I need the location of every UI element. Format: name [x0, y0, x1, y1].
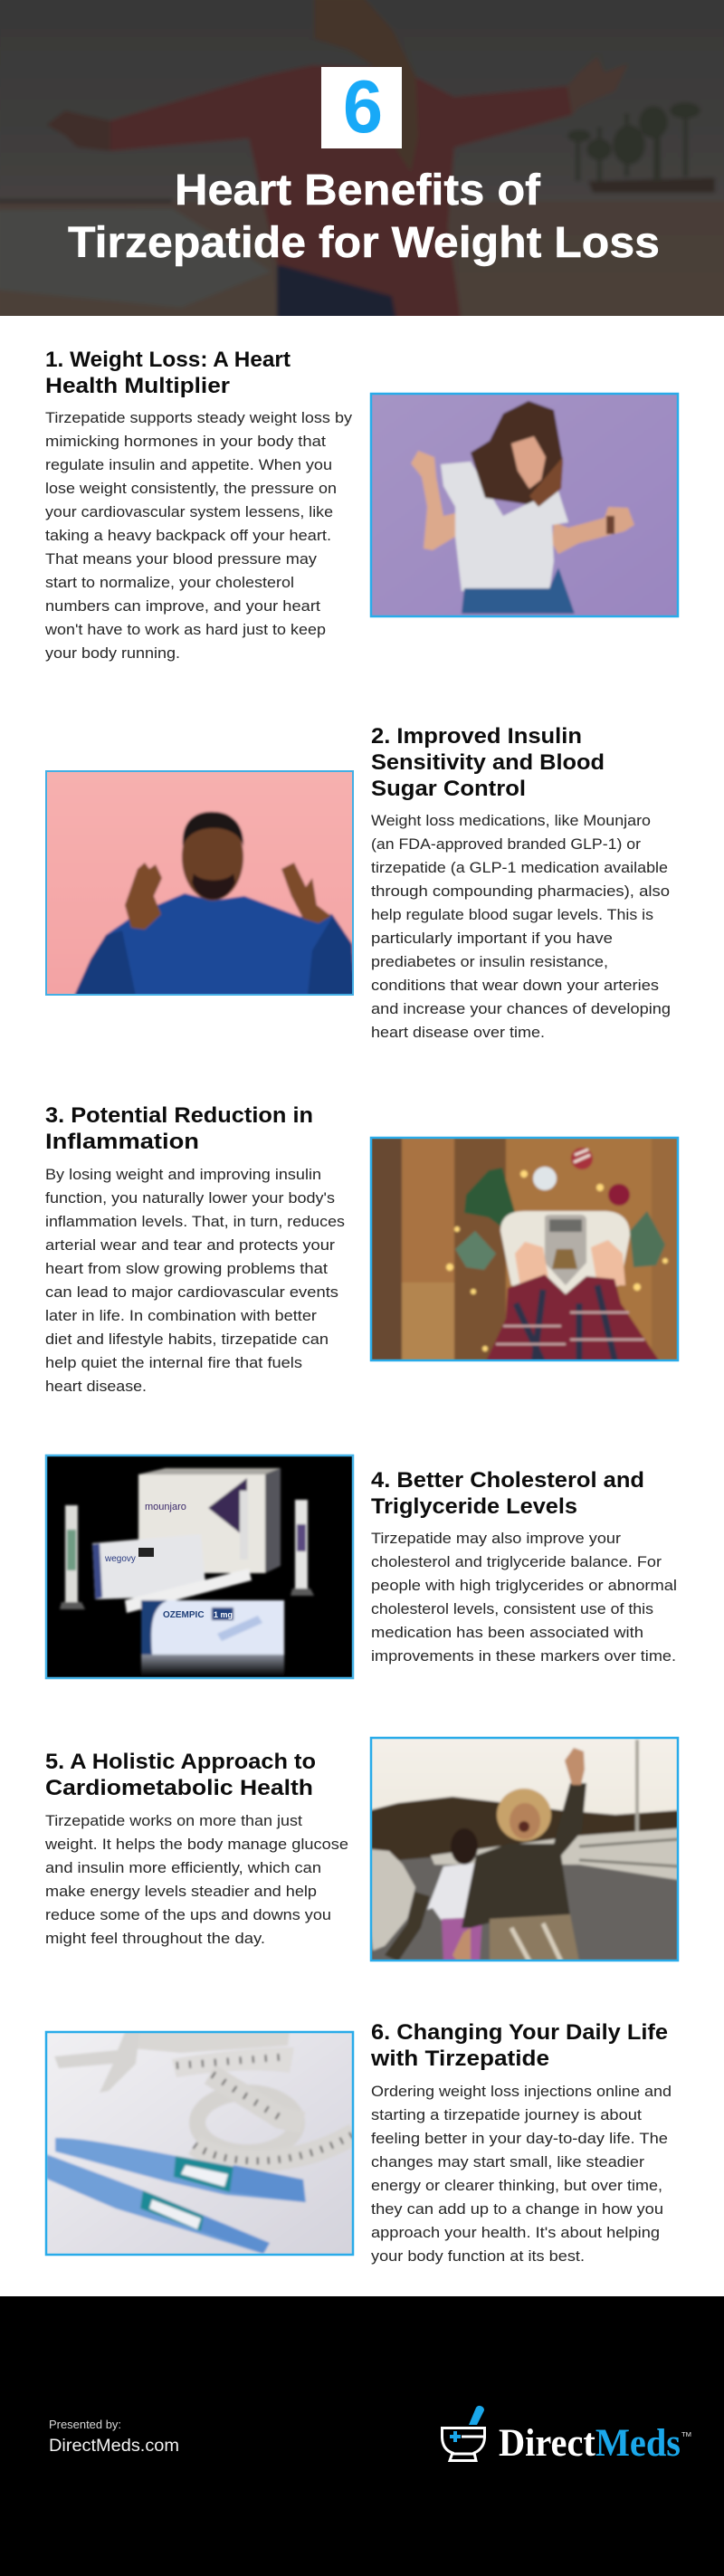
photo: women running outdoors on road: [370, 1737, 679, 1961]
body text 1: taking a heavy backpack off your heart.: [45, 527, 331, 544]
body text 3: help quiet the internal fire that fuels: [45, 1354, 302, 1371]
logo: DirectMeds: [442, 2406, 691, 2465]
body text 1: [44, 409, 353, 662]
heading 5: 5. A Holistic Approach to: [45, 1750, 316, 1774]
body text 2: tirzepatide (a GLP-1 medication available: [371, 859, 668, 876]
body text 4: improvements in these markers over time.: [371, 1647, 676, 1665]
heading 4: [371, 1468, 644, 1519]
body text 4: cholesterol and triglyceride balance. For: [371, 1553, 662, 1570]
body text 6: your body function at its best.: [371, 2247, 585, 2265]
body text 4: people with high triglycerides or abnormal: [371, 1577, 677, 1594]
body text 2: Weight loss medications, like Mounjaro: [371, 812, 651, 829]
body text 3: arterial wear and tear and protects your: [45, 1236, 335, 1254]
heading 2: Sensitivity and Blood: [371, 750, 605, 775]
photo: medication boxes and pens on black: OZEMPIC: [163, 1610, 205, 1620]
photo: medication boxes and pens on black: 1 mg: [214, 1610, 233, 1619]
body text 2: heart disease over time.: [371, 1024, 545, 1041]
panel: section 6 daily life: [45, 2020, 672, 2265]
panel: section 2 insulin sensitivity: [45, 724, 671, 1041]
body text 1: regulate insulin and appetite. When you: [45, 456, 332, 473]
body text 4: cholesterol levels, consistent use of this: [371, 1600, 653, 1617]
panel: section 4 cholesterol: [45, 1455, 677, 1679]
body text 4: medication has been associated with: [371, 1624, 643, 1641]
heading 5: [45, 1750, 316, 1800]
heading 6: [370, 2020, 668, 2071]
trademark: TM: [681, 2432, 691, 2438]
heading 2: [371, 724, 605, 801]
body text 5: and insulin more efficiently, which can: [45, 1859, 321, 1876]
body text 4: Tirzepatide may also improve your: [371, 1530, 621, 1547]
photo: man crossing fingers on pink background: [45, 770, 355, 996]
body text 2: prediabetes or insulin resistance,: [371, 953, 608, 970]
body text 1: start to normalize, your cholesterol: [45, 574, 294, 591]
photo: happy woman on purple background: [370, 393, 679, 617]
body text 6: changes may start small, like steadier: [371, 2153, 644, 2171]
body text 6: Ordering weight loss injections online and: [371, 2083, 672, 2100]
hero photo: woman on beach with arms outstretched: [0, 0, 724, 323]
heading 6: 6. Changing Your Daily Life: [371, 2020, 668, 2045]
body text 3: can lead to major cardiovascular events: [45, 1283, 338, 1301]
heading 2: Sugar Control: [371, 777, 526, 801]
hero banner: [0, 0, 724, 323]
body text 2: [371, 812, 671, 1041]
photo: medication boxes and pens on black: mounjaro: [145, 1502, 186, 1512]
body text 5: make energy levels steadier and help: [45, 1883, 317, 1900]
body text 1: That means your blood pressure may: [45, 550, 318, 568]
heading 1: Health Multiplier: [45, 374, 230, 398]
title: [68, 167, 660, 267]
body text 6: [371, 2083, 672, 2265]
body text 6: approach your health. It's about helping: [371, 2224, 660, 2241]
body text 1: numbers can improve, and your heart: [45, 597, 320, 615]
body text 5: [44, 1812, 348, 1947]
body text 3: inflammation levels. That, in turn, reduces: [45, 1213, 345, 1230]
body text 2: help regulate blood sugar levels. This is: [371, 906, 653, 923]
body text 1: your cardiovascular system lessens, like: [45, 503, 333, 520]
body text 3: [45, 1166, 345, 1395]
body text 1: lose weight consistently, the pressure on: [45, 480, 337, 497]
title: Tirzepatide for Weight Loss: [68, 219, 660, 267]
body text 2: conditions that wear down your arteries: [371, 977, 659, 994]
heading 5: Cardiometabolic Health: [45, 1776, 313, 1800]
body text 2: through compounding pharmacies), also: [371, 883, 670, 900]
body text 6: starting a tirzepatide journey is about: [371, 2106, 642, 2123]
body text 3: diet and lifestyle habits, tirzepatide can: [45, 1331, 329, 1348]
body text 4: [371, 1530, 677, 1665]
wordmark: DirectMeds: [499, 2422, 681, 2465]
body text 1: Tirzepatide supports steady weight loss by: [45, 409, 353, 426]
heading 3: 3. Potential Reduction in: [45, 1103, 313, 1128]
body text 6: they can add up to a change in how you: [371, 2200, 663, 2218]
presented by text: [49, 2418, 179, 2456]
heading 1: [45, 348, 291, 398]
body text 6: energy or clearer thinking, but over time,: [371, 2177, 662, 2194]
photo: medication boxes and pens on black: [45, 1455, 354, 1679]
photo: medication boxes and pens on black: wegovy: [104, 1554, 136, 1564]
title: Heart Benefits of: [175, 167, 541, 215]
number badge: 6: [343, 64, 383, 148]
body text 6: feeling better in your day-to-day life. The: [371, 2130, 668, 2147]
body text 2: particularly important if you have: [371, 930, 613, 947]
footer: [0, 2296, 724, 2576]
photo: feet on scale with holiday decorations: [370, 1137, 679, 1363]
body text 1: won't have to work as hard just to keep: [44, 621, 326, 638]
heading 6: with Tirzepatide: [370, 2046, 549, 2071]
body text 3: function, you naturally lower your body's: [45, 1189, 335, 1207]
heading 4: Triglyceride Levels: [371, 1494, 577, 1519]
heading 3: [45, 1103, 313, 1154]
heading 2: 2. Improved Insulin: [371, 724, 582, 749]
body text 3: By losing weight and improving insulin: [45, 1166, 321, 1183]
heading 4: 4. Better Cholesterol and: [371, 1468, 644, 1493]
heading 1: 1. Weight Loss: A Heart: [45, 348, 291, 372]
body text 5: reduce some of the ups and downs you: [45, 1906, 331, 1923]
body text 1: your body running.: [45, 644, 180, 662]
body text 3: heart disease.: [45, 1378, 147, 1395]
body text 5: weight. It helps the body manage glucose: [44, 1836, 348, 1853]
presented by text: DirectMeds.com: [49, 2437, 179, 2456]
heading 3: Inflammation: [45, 1130, 199, 1154]
panel: section 5 holistic approach: [44, 1737, 679, 1961]
number badge: [321, 64, 402, 148]
body text 1: mimicking hormones in your body that: [45, 433, 326, 450]
body text 2: and increase your chances of developing: [371, 1000, 671, 1017]
body text 2: (an FDA-approved branded GLP-1) or: [371, 835, 641, 853]
body text 3: heart from slow growing problems that: [45, 1260, 328, 1277]
photo: injection pens and measuring tape: [45, 2027, 355, 2256]
body text 3: later in life. In combination with better: [45, 1307, 317, 1324]
presented by text: Presented by:: [49, 2418, 121, 2431]
panel: section 3 inflammation: [45, 1103, 679, 1395]
body text 5: might feel throughout the day.: [45, 1930, 265, 1947]
body text 5: Tirzepatide works on more than just: [45, 1812, 302, 1829]
panel: section 1 weight loss: [44, 348, 679, 662]
icon: mortar and pestle: [442, 2406, 485, 2460]
